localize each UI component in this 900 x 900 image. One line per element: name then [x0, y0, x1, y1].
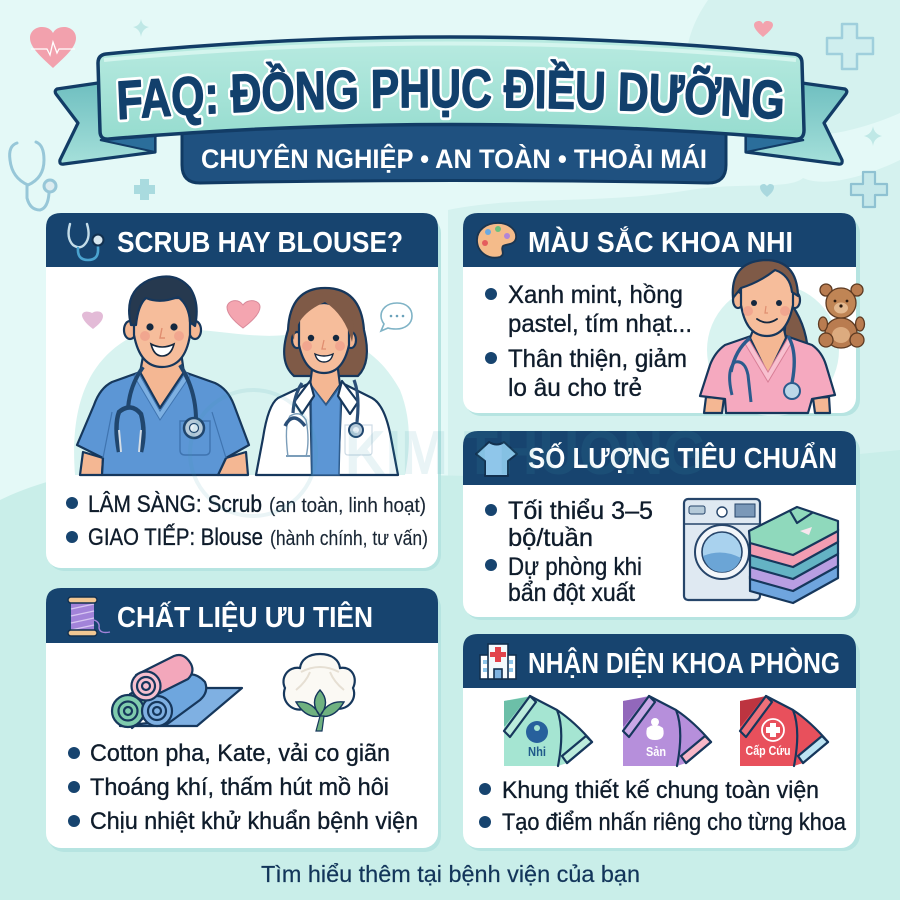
bullet list: Tối thiểu 3–5: [508, 497, 653, 525]
bullet list: (hành chính, tư vấn): [270, 528, 428, 550]
heading: CHẤT LIỆU ƯU TIÊN: [117, 600, 373, 634]
figure: male nurse in scrub: [77, 276, 249, 475]
shirt: Sản: [623, 696, 711, 766]
bullet list: Tạo điểm nhấn riêng cho từng khoa: [502, 809, 847, 836]
bullet list: Thoáng khí, thấm hút mồ hôi: [90, 774, 389, 801]
bullet list: Khung thiết kế chung toàn viện: [502, 777, 819, 804]
heading: SCRUB HAY BLOUSE?: [117, 227, 403, 259]
label: Sản: [646, 744, 666, 759]
icon: medical cross lower right: [851, 172, 887, 207]
bullet list: [68, 740, 418, 835]
illustration: nurses: [74, 276, 412, 475]
icon: small heart: [760, 184, 774, 197]
bullet list: [66, 491, 428, 551]
panel: scrub hay blouse: [46, 213, 441, 571]
bullet list: (an toàn, linh hoạt): [269, 495, 426, 517]
bullet list: Chịu nhiệt khử khuẩn bệnh viện: [90, 808, 418, 835]
heading: SỐ LƯỢNG TIÊU CHUẨN: [528, 441, 837, 475]
icon: teddy bear: [818, 284, 864, 348]
bullet list: bộ/tuần: [508, 524, 593, 552]
heading: MÀU SẮC KHOA NHI: [528, 225, 793, 259]
panel: nhận diện khoa phòng: [463, 634, 860, 851]
icon: stethoscope: [69, 224, 104, 260]
illustration: washing machine and clothes: [684, 499, 838, 603]
bullet list: [485, 497, 653, 607]
bullet list: lo âu cho trẻ: [508, 374, 642, 402]
backdrop blob: [74, 329, 409, 475]
icon: pink heart small: [82, 311, 103, 329]
bullet list: Xanh mint, hồng: [508, 281, 683, 309]
panel: chất liệu ưu tiên: [46, 588, 441, 852]
subtitle: CHUYÊN NGHIỆP • AN TOÀN • THOẢI MÁI: [201, 142, 707, 174]
title ribbon: [54, 35, 848, 184]
washing machine: [684, 499, 760, 600]
ribbon right tail: [746, 83, 847, 164]
label: Nhi: [528, 744, 546, 759]
bullet list: [479, 777, 847, 836]
panel: màu sắc khoa nhi: [463, 213, 864, 416]
bullet list: Cotton pha, Kate, vải co giãn: [90, 740, 390, 767]
illustration: cotton boll: [283, 654, 355, 731]
footer: Tìm hiểu thêm tại bệnh viện của bạn: [261, 861, 640, 887]
title: FAQ: ĐỒNG PHỤC ĐIỀU DƯỠNG: [118, 59, 783, 126]
subtitle plate: [182, 120, 726, 183]
icon: heart with pulse: [30, 27, 76, 68]
watermark: [190, 390, 707, 516]
label: Cấp Cứu: [746, 743, 791, 758]
panel: số lượng tiêu chuẩn: [463, 431, 860, 620]
icon: small cross left: [134, 179, 155, 200]
icon: sparkle left: [133, 19, 149, 37]
ribbon left tail: [55, 83, 155, 164]
icon: stethoscope background: [10, 142, 56, 210]
icon: medical cross top right: [827, 24, 873, 69]
ribbon main band: [98, 37, 804, 139]
watermark: KIM THUONG: [345, 419, 707, 488]
icon: palette: [477, 223, 516, 258]
folded clothes stack: [749, 507, 838, 603]
bullet list: Dự phòng khi: [508, 553, 642, 581]
bullet list: bẩn đột xuất: [508, 579, 635, 607]
icon: pink heart large: [227, 301, 260, 328]
title: FAQ: ĐỒNG PHỤC ĐIỀU DƯỠNG: [116, 56, 785, 128]
bullet list: pastel, tím nhạt...: [508, 310, 692, 338]
icon: thread spool: [68, 597, 110, 636]
icon: hospital: [480, 644, 516, 679]
icon: speech bubble: [381, 303, 412, 331]
bullet list: LÂM SÀNG: Scrub: [88, 491, 262, 518]
icon: sparkle right: [864, 126, 882, 146]
illustration: nurse in pink: [700, 260, 864, 416]
bullet list: Thân thiện, giảm: [508, 345, 687, 373]
heading: NHẬN DIỆN KHOA PHÒNG: [528, 646, 840, 680]
shirt: Nhi: [504, 696, 592, 766]
bullet list: GIAO TIẾP: Blouse: [88, 523, 263, 551]
figure: female nurse in blouse: [256, 288, 398, 475]
icon: t-shirt: [476, 442, 517, 476]
shirt: Cấp Cứu: [740, 696, 828, 766]
illustration: fabric rolls: [112, 655, 242, 728]
bullet list: [485, 281, 692, 402]
icon: pink heart right: [754, 21, 773, 37]
